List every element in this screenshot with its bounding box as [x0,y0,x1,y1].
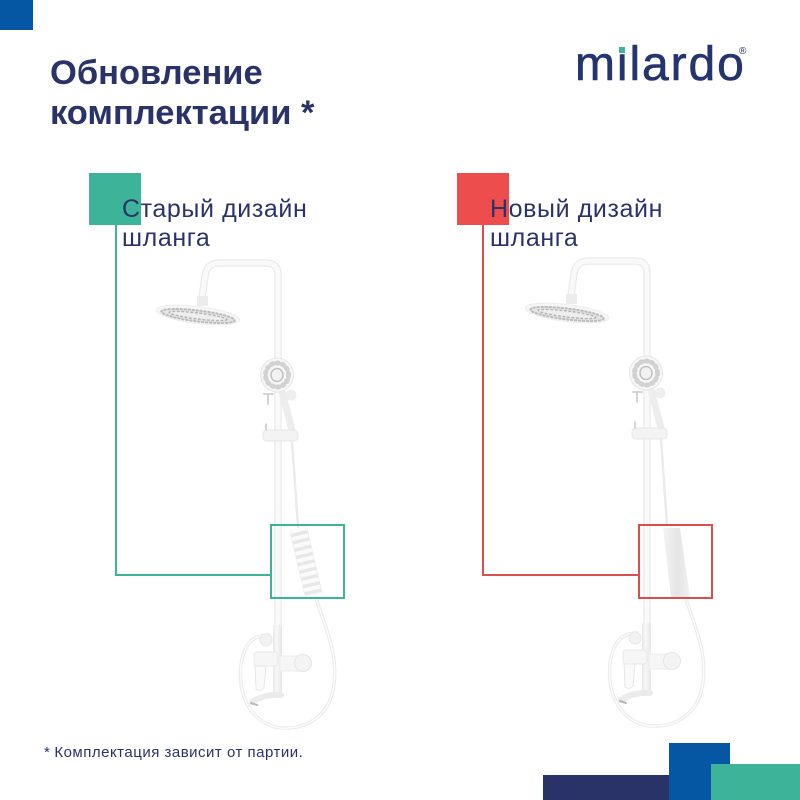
old callout lines and frame [116,225,344,598]
new marker square [457,173,509,225]
new smooth hose sleeve [663,528,690,597]
old ribbed hose sleeve [298,528,314,596]
label: old design: шланга [122,224,210,252]
footnote: * Комплектация зависит от партии. [44,744,303,761]
title [50,54,314,132]
decorative corner square [0,0,33,30]
old marker square [89,173,141,225]
old design shower [155,263,335,728]
new design shower [524,261,704,726]
label: new design: Новый дизайн [490,195,663,223]
label: new design: шланга [490,224,578,252]
new callout lines and frame [483,225,712,598]
label: old design: Старый дизайн [122,195,307,223]
label: new design [490,195,663,252]
label: old design [122,195,307,252]
title: Обновление [50,54,263,92]
title: комплектации * [50,94,314,132]
decorative bottom blocks [543,743,800,800]
logo: milardo: ® [739,46,746,57]
logo: milardo: milardo [575,38,746,91]
